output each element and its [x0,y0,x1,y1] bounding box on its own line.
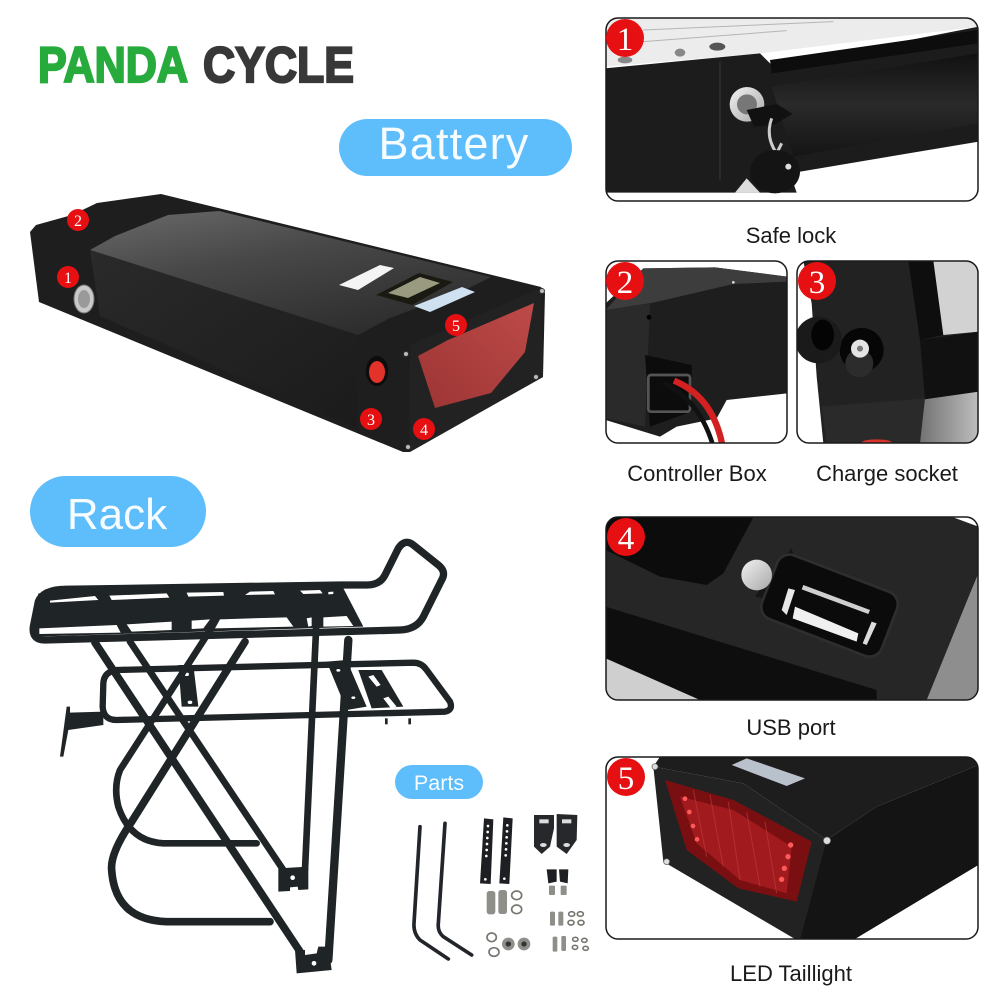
battery body [606,27,978,193]
charging port [840,328,884,377]
rack lower frame [103,663,451,720]
rack plate behind the lock [606,18,978,67]
USB socket [755,548,902,660]
lower frame plates [178,660,411,724]
parts kit [414,814,588,959]
rack rear vertical struts [305,617,348,960]
panel 1 number badge [606,19,644,58]
specification label [339,265,475,312]
heading pill: Battery [339,118,572,176]
detail panel 4: USB port [606,517,978,700]
screws [404,288,544,450]
panel 2 number badge [606,262,644,301]
battery side panel [90,250,358,428]
panel 2 number badge: 2 [617,265,633,301]
logo: Panda Cycle [38,37,354,93]
panel 5 number badge [607,758,645,797]
red lens [665,780,812,902]
caption: charge socket: Charge socket [816,461,958,486]
heading pill: Rack [30,476,206,547]
heading pill: Battery: Battery [379,118,529,169]
key [730,87,800,193]
panel 3 number badge [798,262,836,301]
marker 5 [445,314,467,336]
power switch [366,356,388,386]
panel 4 number badge [607,518,645,557]
caption: safe lock: Safe lock [746,223,837,248]
detail panel 5: LED taillight [606,757,978,940]
screws [652,764,831,865]
logo: Panda Cycle: CYCLE [203,37,354,93]
taillight lens [418,303,534,408]
marker 3: 3 [367,412,375,429]
battery rear face [409,288,543,452]
battery body outline [30,194,545,452]
heading pill: Rack: Rack [67,490,168,539]
red switch edge [862,439,892,442]
washers [487,891,588,956]
caption: USB port: USB port [746,715,836,740]
detail panel 1: safe lock [606,18,978,201]
indicator sticker [732,758,805,786]
battery body [653,757,978,840]
LEDs [683,796,793,882]
detail panel 2: controller box [606,261,787,447]
controller housing [606,267,787,437]
caption: LED taillight: LED Taillight [730,961,852,986]
detail panel 3: charge socket [795,261,978,446]
logo: Panda Cycle: PANDA [38,37,188,93]
marker 1: 1 [64,270,72,287]
caption: controller box: Controller Box [627,461,767,486]
rack top frame [33,542,444,640]
marker 2: 2 [74,213,82,230]
rack diagonal struts [95,620,300,952]
socket housing [803,261,978,443]
heading pill: Parts [395,765,483,799]
panel 4 number badge: 4 [618,521,634,557]
marker 4 [413,418,435,440]
key lock [74,285,94,313]
stay rods [414,823,472,959]
lens grid [693,790,777,893]
rear rack illustration [33,542,451,973]
cables [688,398,714,442]
rubber cap [795,317,842,363]
rack lower mount plates [278,867,332,973]
slotted straps [480,817,513,884]
panel 5 number badge: 5 [618,761,634,797]
heading pill: Parts: Parts [414,771,464,795]
screw [741,560,772,590]
panel 1 number badge: 1 [617,22,633,58]
small clamps [547,869,568,883]
connector [645,355,692,427]
rack mounting bracket [60,707,103,757]
marker 1 [57,266,79,288]
L brackets [534,814,577,854]
battery face [606,517,978,700]
marker 5: 5 [452,318,460,335]
rack top deck [33,585,363,637]
marker 3 [360,408,382,430]
bolts and nuts [487,886,567,952]
marker 2 [67,209,89,231]
battery illustration [30,194,545,452]
panel 3 number badge: 3 [809,265,825,301]
marker 4: 4 [420,422,428,439]
battery top cover [90,211,491,335]
